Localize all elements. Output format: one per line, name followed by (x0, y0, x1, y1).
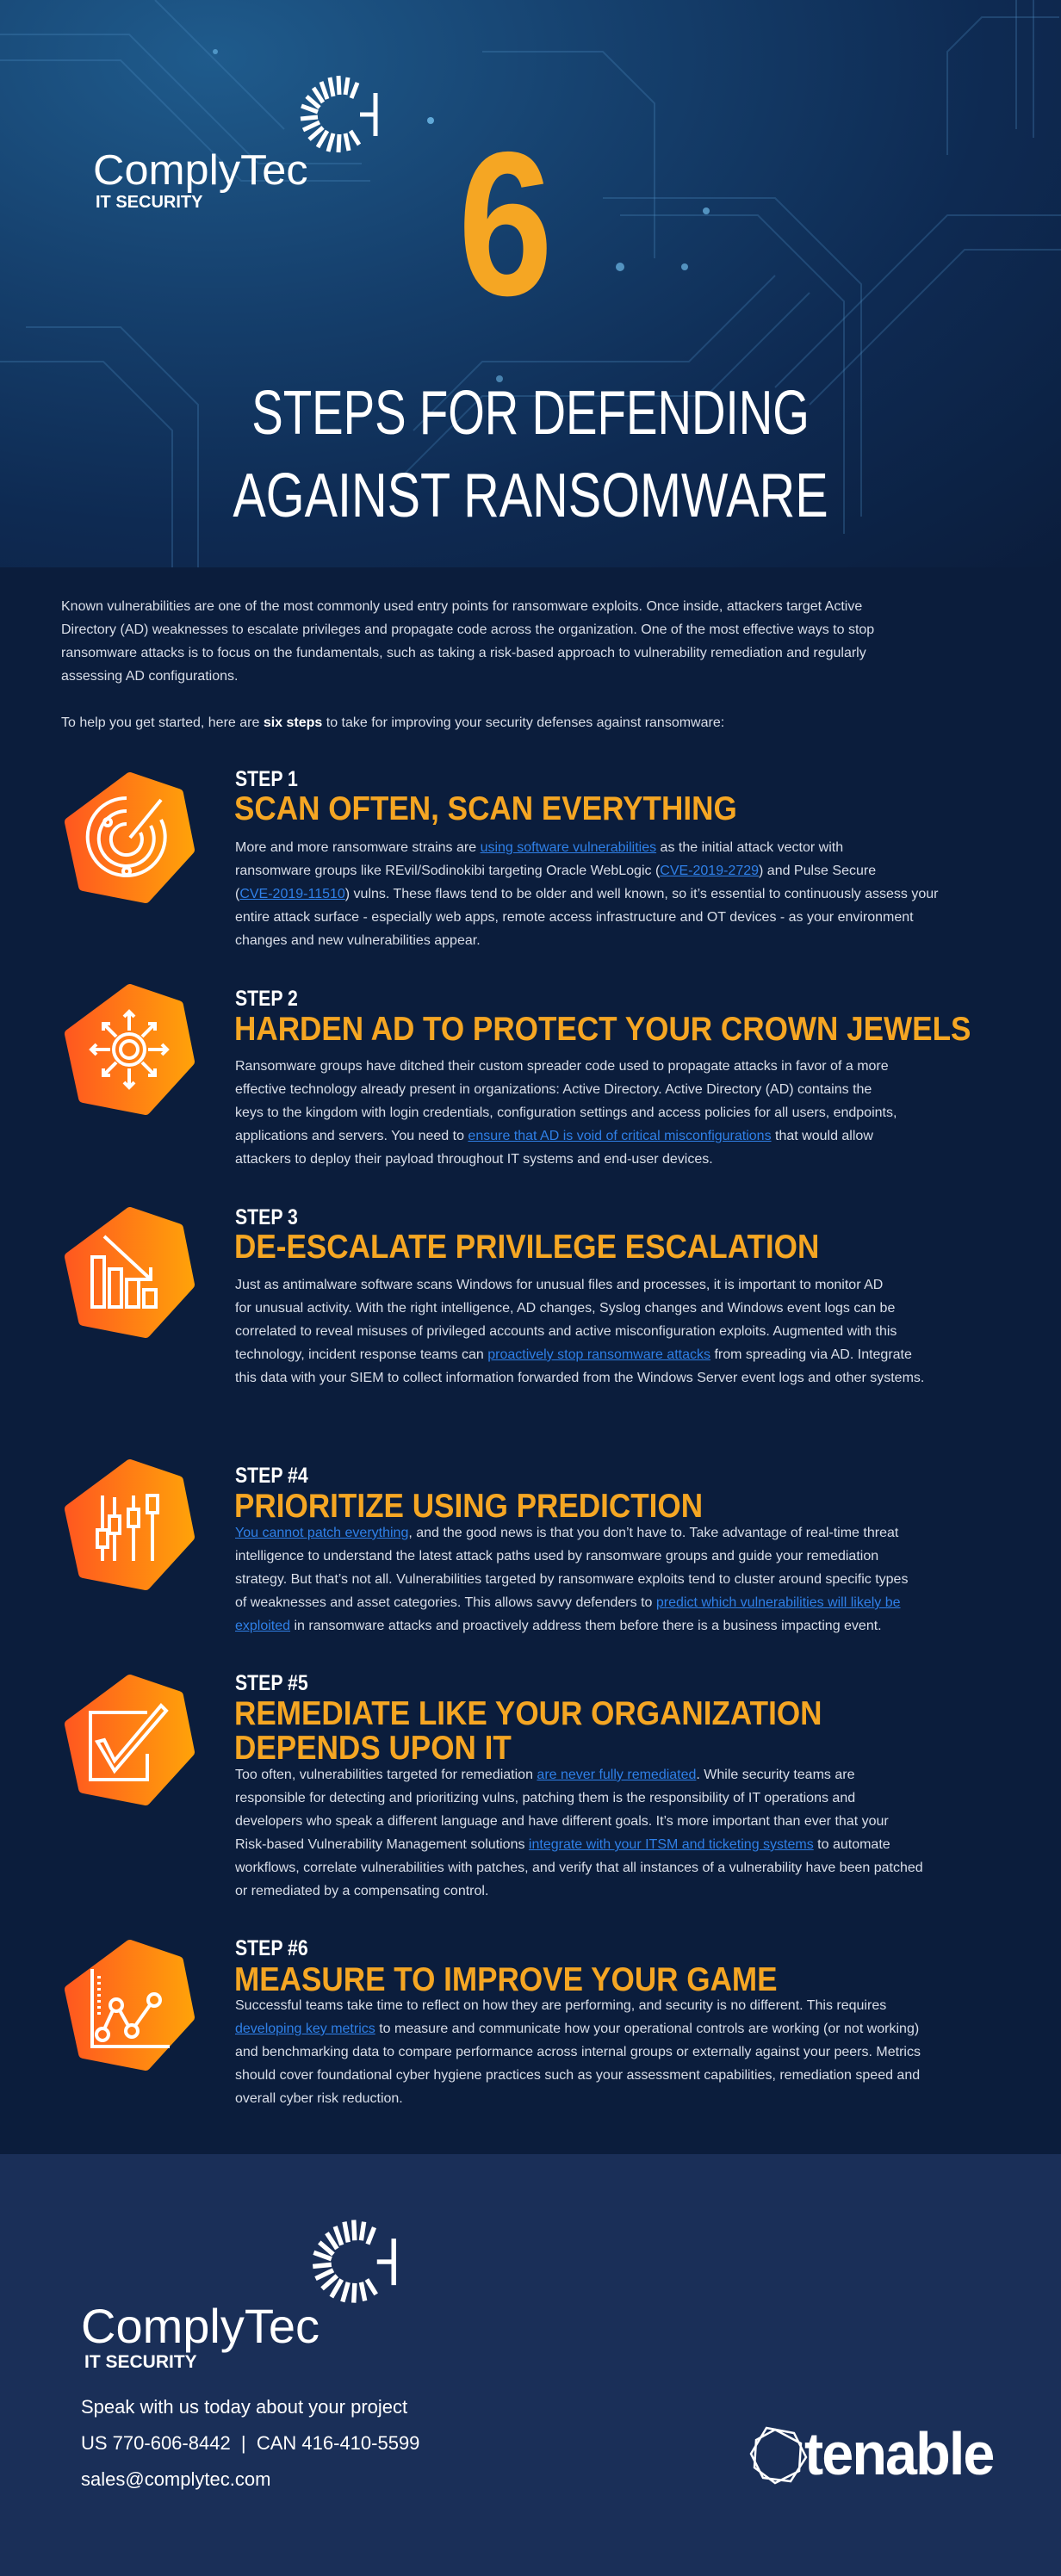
contact info (81, 2396, 419, 2490)
step 6 (65, 1936, 921, 2106)
step title: SCAN OFTEN, SCAN EVERYTHING (234, 790, 737, 827)
step title: DE-ESCALATE PRIVILEGE ESCALATION (234, 1229, 819, 1266)
step body: intelligence to understand the latest attack paths used by ransomware groups and guide your remediation (235, 1549, 878, 1564)
icon: declining bar chart (65, 1207, 195, 1338)
step body (235, 1059, 897, 1167)
step body: More and more ransomware strains are using software vulnerabilities as the initial attack vector with (235, 840, 843, 855)
icon: line chart (65, 1940, 195, 2071)
step title: DEPENDS UPON IT (234, 1730, 512, 1767)
logo subtitle: IT SECURITY (84, 2352, 197, 2372)
step title: MEASURE TO IMPROVE YOUR GAME (234, 1961, 778, 1998)
step body (235, 1998, 921, 2106)
contact info: Speak with us today about your project (81, 2396, 407, 2418)
intro text: Known vulnerabilities are one of the most commonly used entry points for ransomware exploits. Once inside, attackers target Active (61, 599, 862, 614)
step label: STEP #6 (235, 1936, 308, 1960)
step 4 (65, 1459, 908, 1633)
step body: developers who speak a different language and have different goals. It’s more important than ever that your (235, 1814, 889, 1829)
logo text: ComplyTec (93, 147, 308, 194)
icon: logo spinner (300, 76, 377, 153)
step title: HARDEN AD TO PROTECT YOUR CROWN JEWELS (234, 1011, 971, 1048)
step body: keys to the kingdom with login credentials, configuration settings and access policies for all users, endpoints, (235, 1105, 897, 1120)
step body: strategy. But that’s not all. Vulnerabilities targeted by ransomware exploits tend to cluster around specific types (235, 1572, 908, 1587)
step body (235, 840, 939, 948)
step body: entire attack surface - especially web apps, remote access infrastructure and OT devices - as your environment (235, 910, 914, 925)
step body: exploited in ransomware attacks and proactively address them before there is a business impacting event. (235, 1619, 882, 1633)
main title: AGAINST RANSOMWARE (233, 461, 828, 530)
step body: effective technology already present in organizations: Active Directory. Active Directory (AD) contains the (235, 1082, 872, 1097)
step title (234, 1695, 822, 1767)
step 2 (65, 984, 971, 1167)
step body: correlated to reveal misuses of privileged accounts and active misconfiguration exploits. Augmented with this (235, 1324, 897, 1339)
big number 6: 6 (458, 110, 553, 338)
contact info: US 770-606-8442 | CAN 416-410-5599 (81, 2432, 419, 2454)
step label: STEP 3 (235, 1205, 298, 1229)
step label: STEP 2 (235, 987, 298, 1011)
step label: STEP #4 (235, 1464, 308, 1488)
intro text: ransomware attacks is to focus on the fundamentals, such as taking a risk-based approach to vulnerability remediation and regularly (61, 646, 866, 660)
icon: radar (65, 772, 195, 903)
footer logo (81, 2220, 396, 2372)
logo subtitle: IT SECURITY (96, 193, 202, 212)
icon: sliders (65, 1459, 195, 1590)
step body (235, 1526, 908, 1633)
step title: REMEDIATE LIKE YOUR ORGANIZATION (234, 1695, 822, 1732)
contact info: sales@complytec.com (81, 2468, 270, 2490)
intro text: Directory (AD) weaknesses to escalate privileges and propagate code across the organization. One of the most effective ways to stop (61, 622, 874, 637)
step body: attackers to deploy their payload throughout IT systems and end-user devices. (235, 1152, 713, 1167)
step body: Just as antimalware software scans Windows for unusual files and processes, it is important to monitor AD (235, 1278, 883, 1292)
step body: of weaknesses and asset categories. This allows savvy defenders to predict which vulnerabilities will likely be (235, 1595, 901, 1610)
step title: PRIORITIZE USING PREDICTION (234, 1488, 703, 1525)
step body: developing key metrics to measure and communicate how your operational controls are working (or not working) (235, 2022, 919, 2036)
step body: (CVE-2019-11510) vulns. These flaws tend to be older and well known, so it’s essential to continuously assess your (235, 887, 938, 901)
step body: Ransomware groups have ditched their custom spreader code used to propagate attacks in favor of a more (235, 1059, 889, 1074)
step label: STEP 1 (235, 767, 298, 791)
step body: overall cyber risk reduction. (235, 2091, 403, 2106)
step body: changes and new vulnerabilities appear. (235, 933, 481, 948)
tenable logo: tenable (804, 2420, 994, 2487)
step body: You cannot patch everything, and the good news is that you don’t have to. Take advantage of real-time threat (235, 1526, 898, 1540)
icon: checkbox (65, 1675, 195, 1805)
intro text: assessing AD configurations. (61, 669, 238, 684)
step body: technology, incident response teams can proactively stop ransomware attacks from spreading via AD. Integrate (235, 1347, 912, 1362)
footer panel (0, 2154, 1061, 2576)
step 1 (65, 767, 939, 948)
step body: for unusual activity. With the right intelligence, AD changes, Syslog changes and Windows event logs can be (235, 1301, 895, 1316)
step body (235, 1768, 923, 1898)
main title (233, 379, 828, 530)
icon: logo spinner (313, 2220, 396, 2303)
step body: should cover foundational cyber hygiene practices such as your assessment capabilities, remediation speed and (235, 2068, 920, 2083)
step body: this data with your SIEM to collect information forwarded from the Windows Server event logs and other systems. (235, 1371, 924, 1385)
header logo: ComplyTec (93, 76, 377, 212)
main title: STEPS FOR DEFENDING (251, 379, 810, 448)
step 5 (65, 1671, 923, 1898)
step body: responsible for detecting and prioritizing vulns, patching them is the responsibility of IT operations and (235, 1791, 855, 1805)
logo text: ComplyTec (81, 2299, 320, 2353)
step body: or remediated by a compensating control. (235, 1884, 488, 1898)
intro text: To help you get started, here are six steps to take for improving your security defenses against ransomware: (61, 715, 724, 730)
step body: applications and servers. You need to ensure that AD is void of critical misconfigurations that would allow (235, 1129, 873, 1143)
hero header background (0, 0, 1061, 567)
step label: STEP #5 (235, 1671, 308, 1695)
step 3 (65, 1205, 924, 1385)
step body: workflows, correlate vulnerabilities with patches, and verify that all instances of a vulnerability have been patched (235, 1861, 923, 1875)
step body: Successful teams take time to reflect on how they are performing, and security is no different. This requires (235, 1998, 886, 2013)
step body (235, 1278, 924, 1385)
intro text (61, 599, 874, 730)
step body: Too often, vulnerabilities targeted for remediation are never fully remediated. While security teams are (235, 1768, 854, 1782)
step body: ransomware groups like REvil/Sodinokibi targeting Oracle WebLogic (CVE-2019-2729) and Pulse Secure (235, 864, 876, 878)
icon: radiating arrows (65, 984, 195, 1115)
step body: and benchmarking data to compare performance across internal groups or externally against your peers. Metrics (235, 2045, 921, 2059)
step body: Risk-based Vulnerability Management solutions integrate with your ITSM and ticketing systems to automate (235, 1837, 890, 1852)
